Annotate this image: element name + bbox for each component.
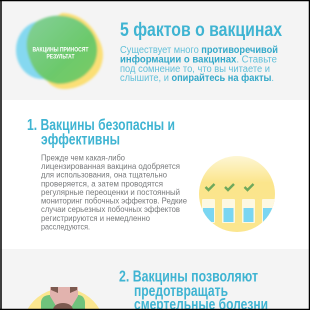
text: fact 1 body: регулярные переоценки и постоянный (41, 187, 180, 197)
text: fact 1 body: расследуются. (41, 222, 90, 232)
panel: fact 1 (27, 117, 275, 232)
text: fact 1 body: лицензированная вакцина одобряется (41, 161, 180, 171)
panel: header (0, 0, 310, 100)
text: fact 1 body: мониторинг побочных эффектов. Редкие (41, 196, 187, 206)
intro text: информации о вакцинах. Ставьте (120, 54, 277, 66)
text: fact 1 body (41, 152, 187, 232)
title: 5 фактов о вакцинах (120, 20, 282, 41)
intro text: под сомнение то, что вы читаете и (120, 64, 270, 75)
icon: watercolor blob: РЕЗУЛЬТАТ (46, 54, 75, 60)
intro text: слышите, и опирайтесь на факты. (120, 72, 274, 84)
text: fact 1 body: Прежде чем какая-либо (41, 152, 125, 162)
intro text (120, 45, 278, 84)
text: fact 1 body: случаи серьезных побочных эффектов (41, 204, 180, 214)
heading: fact 1: 1. Вакцины безопасны и (27, 117, 175, 134)
heading: fact 1 (27, 117, 175, 148)
icon: figure on yellow circle (27, 287, 100, 310)
icon: watercolor blob (16, 13, 103, 89)
heading: fact 2 (119, 268, 268, 310)
text: fact 1 body: проверяется, а затем проводятся (41, 178, 163, 188)
panel: fact 2 (0, 249, 310, 310)
icon: vaccine vials with checkmarks (199, 156, 275, 232)
icon: watercolor blob: ВАКЦИНЫ ПРИНОСЯТ (32, 46, 89, 54)
text: fact 1 body: для использования, она тщательно (41, 170, 167, 180)
heading: fact 2: предотвращать (134, 283, 228, 300)
heading: fact 2: 2. Вакцины позволяют (119, 268, 258, 286)
text: fact 1 body: регистрируются и немедленно (41, 213, 150, 223)
intro text: Существует много противоречивой (120, 45, 278, 56)
heading: fact 1: эффективны (41, 132, 120, 148)
